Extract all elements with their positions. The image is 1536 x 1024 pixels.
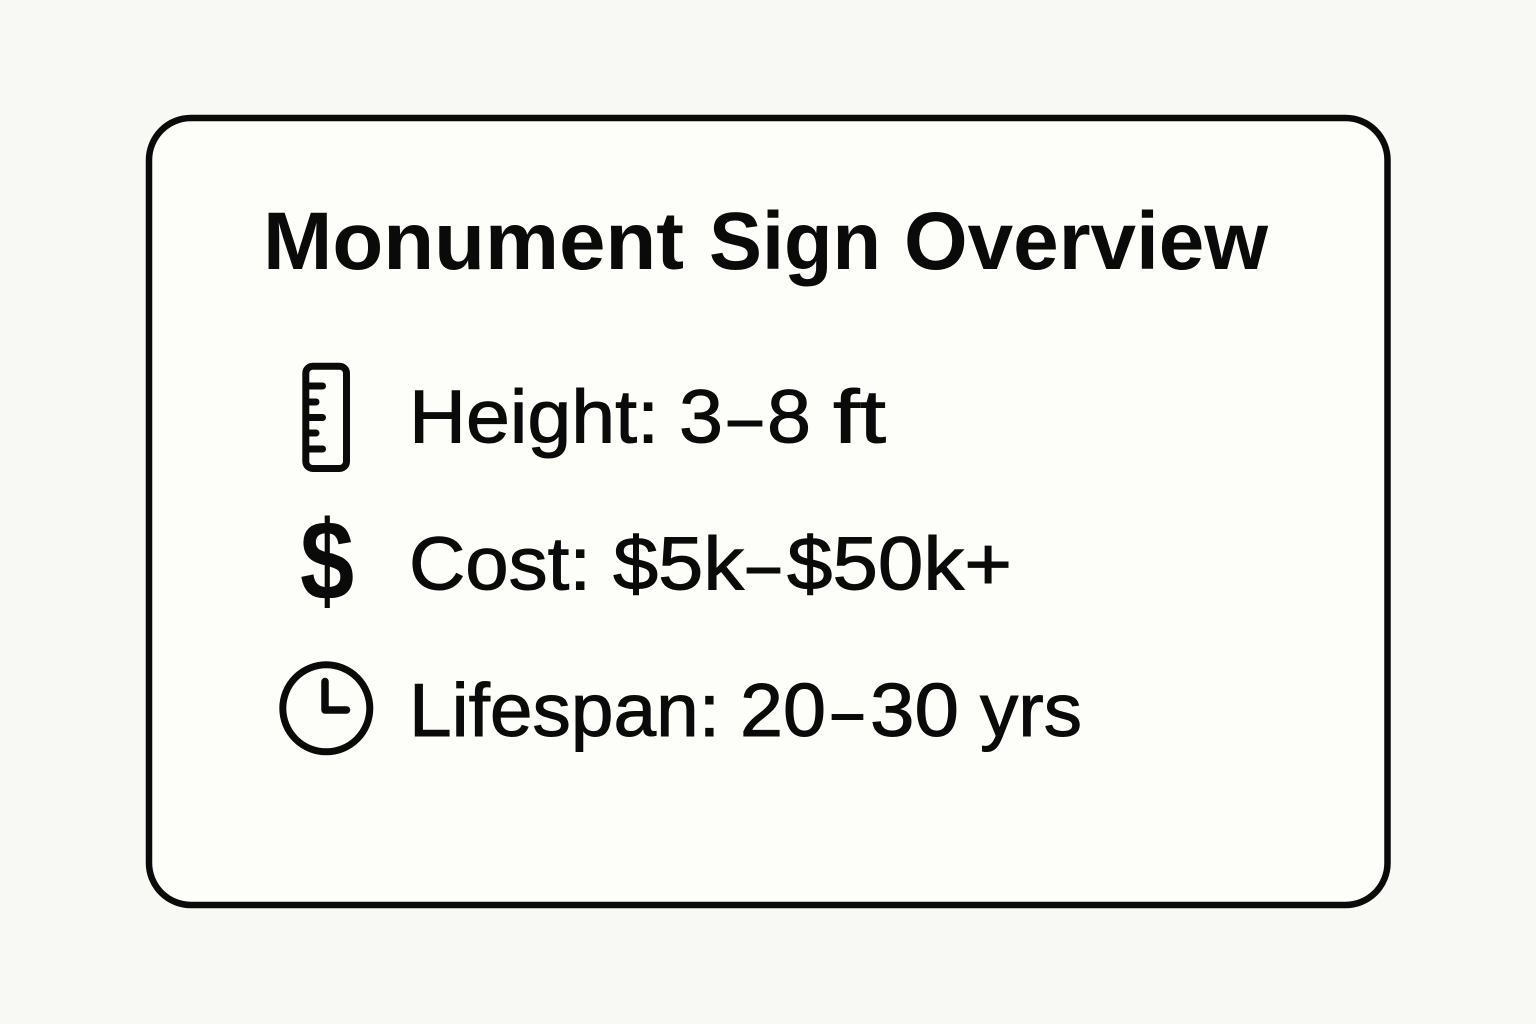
height label: Height: bbox=[409, 374, 659, 458]
height label: ft bbox=[833, 374, 886, 458]
icon: dollar sign: $ bbox=[300, 499, 354, 624]
lifespan label: Lifespan: bbox=[409, 668, 720, 752]
title: Monument bbox=[263, 196, 684, 287]
lifespan label: 20 bbox=[740, 668, 826, 752]
cost label: Cost: bbox=[409, 522, 591, 606]
title: Overview bbox=[904, 196, 1268, 287]
title: Sign bbox=[709, 196, 881, 287]
panel: overview card bbox=[149, 118, 1388, 905]
icon: clock bbox=[283, 665, 370, 752]
lifespan label: – bbox=[832, 668, 863, 752]
height label: 8 bbox=[767, 374, 811, 458]
lifespan label: 30 bbox=[870, 668, 959, 752]
lifespan label: yrs bbox=[980, 668, 1082, 752]
cost label: $5k bbox=[613, 522, 744, 606]
height label: 3 bbox=[679, 374, 723, 458]
cost label: – bbox=[747, 522, 780, 606]
cost label: $50k+ bbox=[787, 522, 1012, 606]
icon: ruler bbox=[306, 366, 346, 468]
height label: – bbox=[728, 374, 762, 458]
